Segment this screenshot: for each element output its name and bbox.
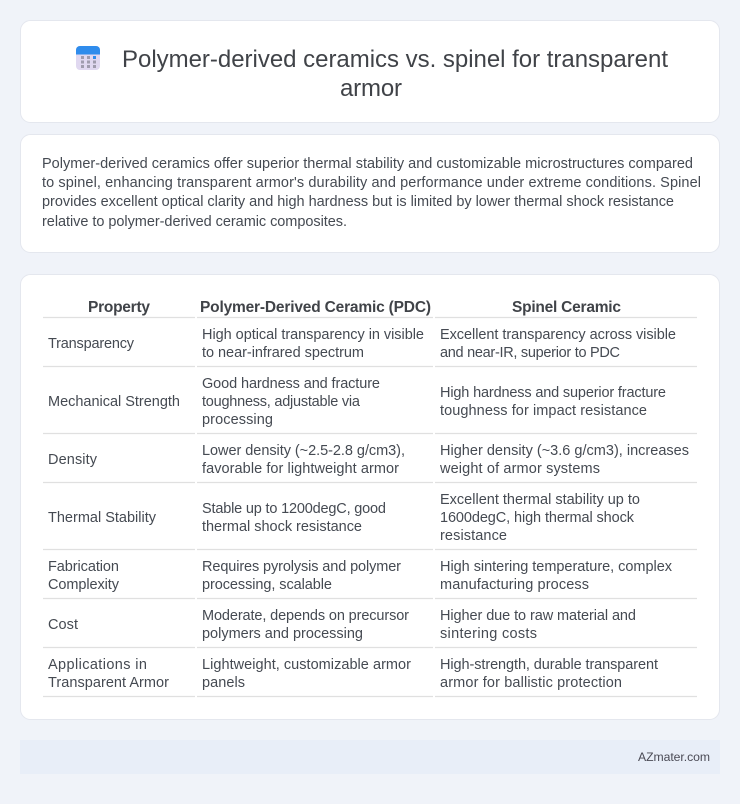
row: applications (48, 657, 658, 691)
panel: title (20, 20, 720, 122)
summary text (42, 156, 701, 230)
row: thermal stability (48, 492, 640, 544)
row: transparency: Excellent transparency across visible (440, 327, 676, 343)
table header: Polymer-Derived Ceramic (PDC) (200, 299, 431, 316)
row: applications: panels (202, 675, 245, 691)
row: thermal stability: Stable up to 1200degC, good (202, 501, 386, 517)
summary text: relative to polymer-derived ceramic composites. (42, 214, 347, 230)
row: transparency: to near-infrared spectrum (202, 345, 364, 361)
summary text: provides excellent optical clarity and high hardness but is limited by lower thermal shock resistance (42, 194, 674, 210)
summary text: to spinel, enhancing transparent armor's durability and performance under extreme conditions. Spinel (42, 175, 701, 191)
row: mechanical strength (48, 376, 666, 428)
panel: summary (20, 134, 720, 252)
row: fabrication complexity: Fabrication (48, 559, 119, 575)
row: cost: sintering costs (440, 626, 537, 642)
title text (122, 46, 668, 102)
row: thermal stability: Excellent thermal stability up to (440, 492, 640, 508)
row: density (48, 443, 689, 477)
row: transparency: High optical transparency in visible (202, 327, 424, 343)
row: cost (48, 608, 636, 642)
row: mechanical strength: toughness for impact resistance (440, 403, 647, 419)
panel: comparison table (20, 274, 720, 720)
row: cost: polymers and processing (202, 626, 363, 642)
row: density: Higher density (~3.6 g/cm3), increases (440, 443, 689, 459)
row: transparency: Transparency (48, 336, 135, 352)
row: density: Lower density (~2.5-2.8 g/cm3), (202, 443, 405, 459)
row: cost: Cost (48, 617, 78, 633)
row: cost: Higher due to raw material and (440, 608, 636, 624)
row: transparency (48, 327, 676, 361)
row: applications: High-strength, durable transparent (440, 657, 658, 673)
row: density: favorable for lightweight armor (202, 461, 399, 477)
row: density: weight of armor systems (439, 461, 600, 477)
row: applications: armor for ballistic protection (440, 675, 622, 691)
row: fabrication complexity: Requires pyrolysis and polymer (202, 559, 401, 575)
icon: calendar (76, 46, 100, 70)
row: thermal stability: resistance (440, 528, 507, 544)
row: transparency: and near-IR, superior to PDC (440, 345, 620, 361)
row: mechanical strength: Mechanical Strength (48, 394, 180, 410)
row: thermal stability: thermal shock resistance (202, 519, 362, 535)
summary text: Polymer-derived ceramics offer superior thermal stability and customizable microstructures compared (42, 156, 693, 172)
row: applications: Lightweight, customizable armor (202, 657, 411, 673)
row: thermal stability: Thermal Stability (48, 510, 157, 526)
title text: armor (340, 75, 402, 102)
row: mechanical strength: toughness, adjustable via (202, 394, 361, 410)
row: thermal stability: 1600degC, high thermal shock (440, 510, 635, 526)
table header: Property (88, 299, 150, 316)
row: fabrication complexity (48, 559, 673, 593)
row: applications: Applications in (48, 657, 147, 673)
title text: Polymer-derived ceramics vs. spinel for transparent (122, 46, 668, 73)
table header: Spinel Ceramic (512, 299, 621, 316)
row: applications: Transparent Armor (48, 675, 169, 691)
footer: AZmater.com (638, 750, 710, 764)
row: fabrication complexity: manufacturing process (440, 577, 589, 593)
row: mechanical strength: Good hardness and fracture (202, 376, 380, 392)
row: fabrication complexity: Complexity (48, 577, 120, 593)
row: fabrication complexity: High sintering temperature, complex (440, 559, 673, 575)
row: mechanical strength: processing (202, 412, 273, 428)
row: cost: Moderate, depends on precursor (202, 608, 409, 624)
row: fabrication complexity: processing, scalable (202, 577, 332, 593)
row: density: Density (48, 452, 98, 468)
footer (20, 740, 720, 774)
table header (88, 299, 621, 316)
row: mechanical strength: High hardness and superior fracture (440, 385, 666, 401)
